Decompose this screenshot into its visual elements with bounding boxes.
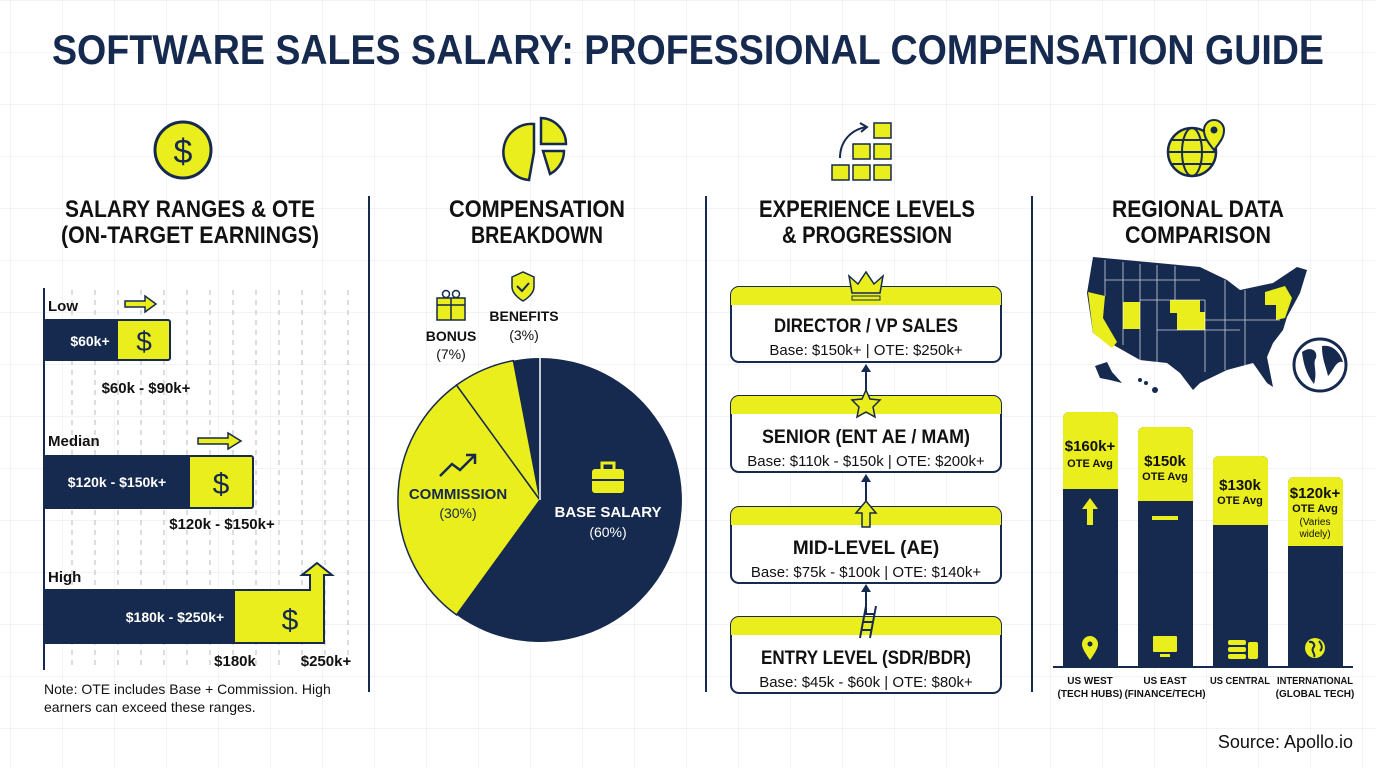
bar: median: $120k - $150k+ xyxy=(169,516,275,533)
heading: salary ranges: SALARY RANGES & OTE xyxy=(65,196,315,223)
icon: pie chart xyxy=(503,118,566,180)
bar chart: salary ranges: High xyxy=(48,569,81,586)
card: senior: SENIOR (ENT AE / MAM) xyxy=(762,427,970,448)
heading: regional data xyxy=(1112,196,1284,249)
label: benefits: (3%) xyxy=(509,327,539,343)
icon: dollar circle: $ xyxy=(174,133,193,171)
label: benefits xyxy=(489,272,559,343)
bar: US Central: OTE Avg xyxy=(1217,495,1263,507)
bar: high: $180k - $250k+ xyxy=(126,609,224,625)
note: Note: OTE includes Base + Commission. High xyxy=(44,681,331,697)
heading: regional data: COMPARISON xyxy=(1125,222,1271,249)
card: senior: Base: $110k - $150k | OTE: $200k+ xyxy=(747,453,985,470)
bar labels: (FINANCE/TECH) xyxy=(1124,689,1206,700)
bar labels: (TECH HUBS) xyxy=(1058,689,1122,700)
bar labels: US CENTRAL xyxy=(1210,676,1270,687)
bar: US West: OTE Avg xyxy=(1067,458,1113,470)
source: Source: Apollo.io xyxy=(1218,732,1353,752)
bar: high xyxy=(44,563,351,670)
card: senior xyxy=(731,390,1001,472)
bar: International: OTE Avg xyxy=(1292,503,1338,515)
heading: compensation breakdown: BREAKDOWN xyxy=(471,222,603,249)
arrow xyxy=(861,474,871,503)
heading: compensation breakdown: COMPENSATION xyxy=(449,196,625,223)
panel: regional data xyxy=(1053,120,1354,700)
label: bonus xyxy=(426,290,476,362)
label: benefits: BENEFITS xyxy=(489,308,559,324)
pie chart: COMMISSION xyxy=(409,486,507,503)
heading: experience levels xyxy=(759,196,975,249)
icon: dollar circle xyxy=(155,122,211,178)
icon: trend arrow xyxy=(440,455,475,476)
bar: low: $60k+ xyxy=(70,333,110,349)
map: US xyxy=(1087,257,1307,393)
bar: US West: $160k+ xyxy=(1065,438,1115,455)
bar: high: $250k+ xyxy=(301,653,351,670)
card: mid-level: MID-LEVEL (AE) xyxy=(793,538,939,559)
bar: median xyxy=(44,433,275,533)
card: director: DIRECTOR / VP SALES xyxy=(774,316,958,337)
bar labels: (GLOBAL TECH) xyxy=(1276,689,1354,700)
bar chart: regional xyxy=(1053,412,1354,700)
bar: US East xyxy=(1138,427,1193,667)
heading: compensation breakdown xyxy=(449,196,625,249)
card: director: Base: $150k+ | OTE: $250k+ xyxy=(769,342,963,359)
heading: regional data: REGIONAL DATA xyxy=(1112,196,1284,223)
bar: International: $120k+ xyxy=(1290,485,1340,502)
bar chart: salary ranges xyxy=(44,288,351,670)
card: mid-level: Base: $75k - $100k | OTE: $140k+ xyxy=(751,564,981,581)
label: bonus: (7%) xyxy=(436,346,466,362)
bar: low xyxy=(44,296,191,397)
arrow xyxy=(861,364,871,392)
card: mid-level xyxy=(731,501,1001,583)
heading: experience levels: EXPERIENCE LEVELS xyxy=(759,196,975,223)
bar: low: $ xyxy=(136,326,152,357)
panel: compensation breakdown xyxy=(398,118,682,642)
bar: US East: $150k xyxy=(1144,453,1187,470)
pie chart: BASE SALARY xyxy=(555,504,661,521)
label: bonus: BONUS xyxy=(426,328,476,344)
bar: International: widely) xyxy=(1298,529,1331,540)
bar: high: $ xyxy=(282,604,299,637)
bar: median: $120k - $150k+ xyxy=(68,474,166,490)
arrow xyxy=(861,584,871,613)
panel: salary ranges xyxy=(44,122,351,715)
heading: salary ranges xyxy=(61,196,319,249)
bar: International: (Varies xyxy=(1300,517,1330,528)
icon: world globe xyxy=(1294,339,1346,391)
note: earners can exceed these ranges. xyxy=(44,699,256,715)
note xyxy=(44,681,331,715)
icon: globe with pin xyxy=(1168,120,1224,176)
bar labels: US EAST xyxy=(1143,676,1187,687)
panel: experience levels xyxy=(731,123,1001,693)
pie chart xyxy=(398,358,682,642)
bar: US Central xyxy=(1213,456,1268,667)
bar: International xyxy=(1288,477,1343,667)
bar: high: $180k xyxy=(214,653,257,670)
card: entry: Base: $45k - $60k | OTE: $80k+ xyxy=(759,674,973,691)
bar: US West xyxy=(1063,412,1118,667)
bar chart: salary ranges: Median xyxy=(48,433,100,450)
heading: salary ranges: (ON-TARGET EARNINGS) xyxy=(61,222,319,249)
bar: US East: OTE Avg xyxy=(1142,471,1188,483)
icon: growth blocks xyxy=(832,123,891,180)
card: entry xyxy=(731,606,1001,693)
bar chart: salary ranges: Low xyxy=(48,298,78,315)
card: entry: ENTRY LEVEL (SDR/BDR) xyxy=(761,648,971,669)
pie chart: (30%) xyxy=(439,505,477,521)
bar labels: INTERNATIONAL xyxy=(1277,676,1353,687)
bar labels xyxy=(1058,676,1354,700)
icon: briefcase xyxy=(592,463,624,493)
heading: experience levels: & PROGRESSION xyxy=(782,222,952,249)
bar: low: $60k - $90k+ xyxy=(102,380,191,397)
pie chart: (60%) xyxy=(589,524,627,540)
bar: US Central: $130k xyxy=(1219,477,1262,494)
bar labels: US WEST xyxy=(1067,676,1113,687)
card: director xyxy=(731,272,1001,362)
bar: median: $ xyxy=(213,468,230,501)
